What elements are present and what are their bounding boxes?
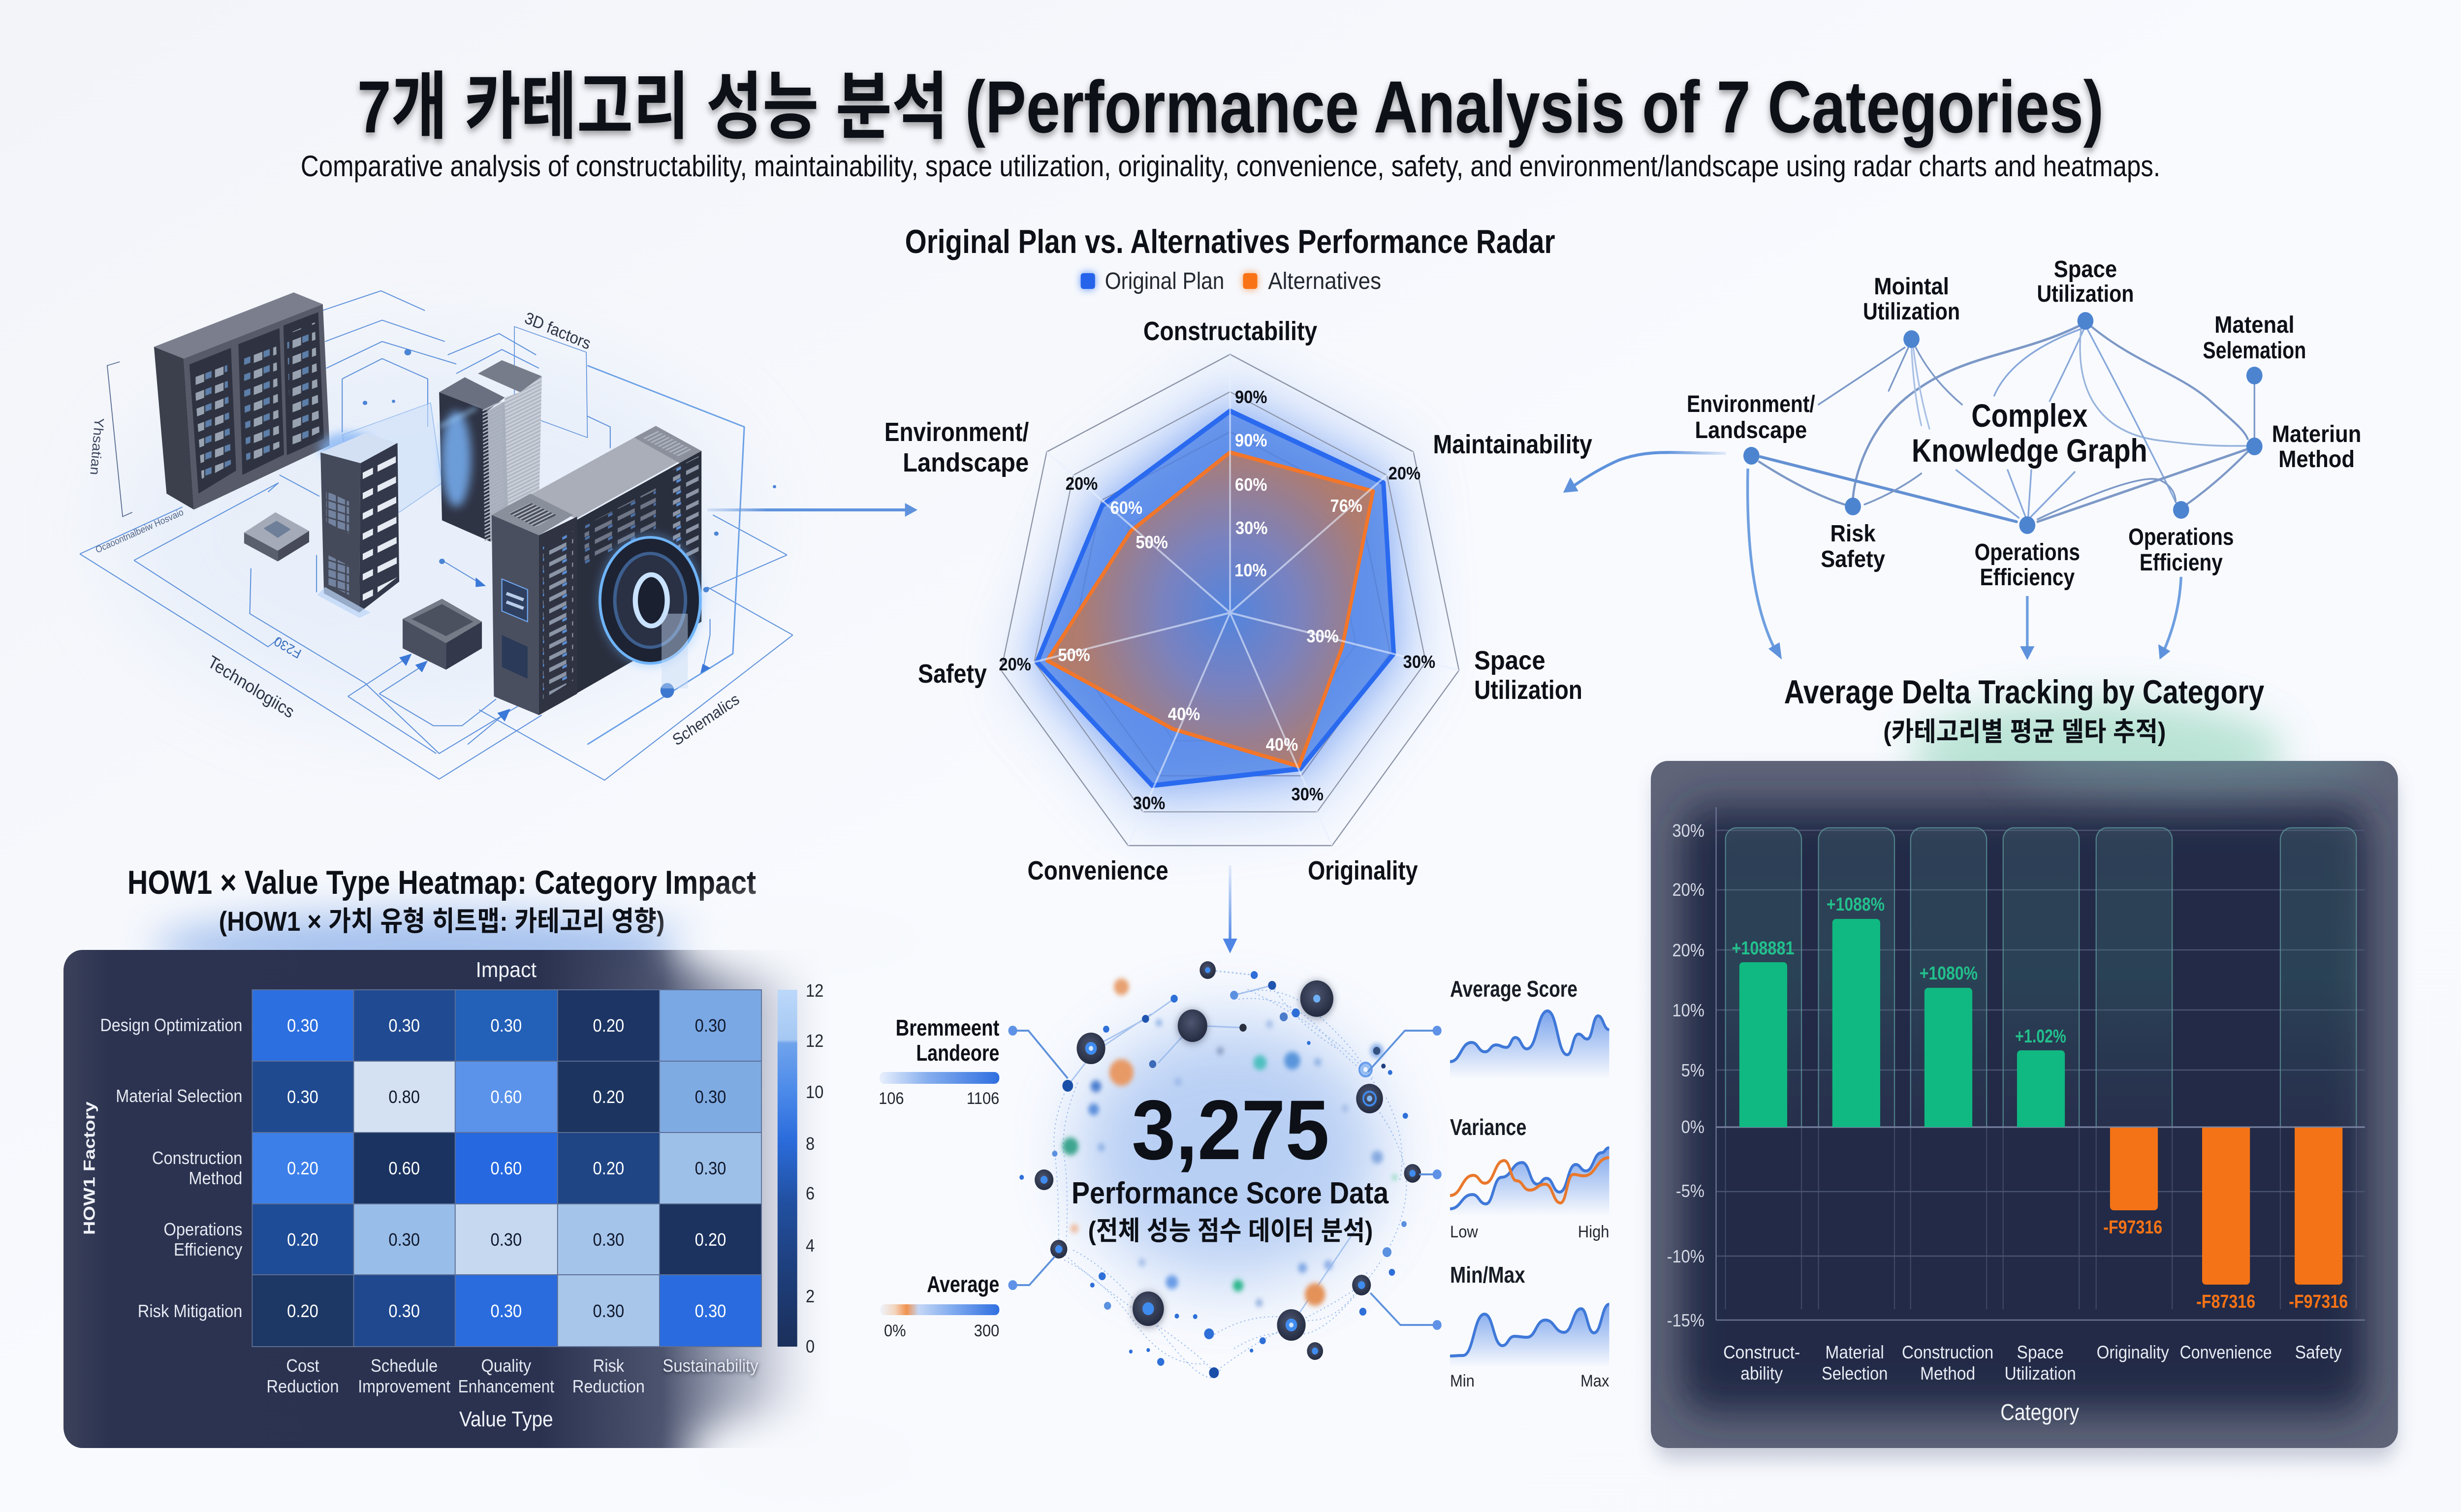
row labels: Risk Mitigation [138,1302,242,1321]
x axis labels: Space [2017,1343,2064,1362]
label: schematics: Schemalics [669,690,742,749]
radar value labels: 20% [1066,474,1098,494]
column labels [266,1356,758,1396]
sparkline: variance [1450,1115,1609,1241]
heatmap values: 0.30 [593,1230,624,1250]
heatmap values: 0.20 [593,1088,624,1107]
colorbar labels: 0 [806,1337,815,1356]
column labels: Reduction [266,1377,339,1396]
sparkline: min max: Min/Max [1450,1262,1525,1288]
left legend: range: 106 [879,1089,904,1107]
rack center tower [317,432,399,618]
bar value labels: +1080% [1920,962,1978,983]
ring node [1359,1063,1372,1076]
y axis labels: -10% [1667,1247,1704,1266]
graph labels: Environment/ [1687,390,1815,417]
radar category labels: Maintainability [1433,429,1592,459]
bar value labels: +108881 [1732,937,1795,958]
y axis labels: 30% [1672,821,1704,841]
sparkline: variance: Low [1450,1223,1478,1241]
heatmap values: 0.30 [287,1016,318,1036]
heatmap values: 0.80 [388,1088,420,1107]
heatmap values: 0.30 [695,1016,726,1036]
radar category labels: Utilization [1474,675,1582,705]
heatmap values [287,1016,726,1321]
bracket [107,362,132,517]
heatmap values: 0.30 [388,1230,420,1250]
radar value labels: 30% [1133,794,1165,813]
colorbar labels: 8 [806,1134,815,1154]
y axis labels: 10% [1672,1001,1704,1020]
large dark nodes [1035,961,1421,1360]
score caption: Performance Score Data [1072,1175,1389,1210]
heatmap values: 0.20 [287,1230,318,1250]
y axis labels: 20% [1672,941,1704,960]
small box B [403,598,482,670]
radar category labels: Originality [1308,855,1418,885]
radar value labels: 20% [999,655,1031,674]
radar category labels: Safety [918,659,987,689]
radar legend: Original Plan [1105,267,1224,294]
label: technologies: Technologiics [205,652,297,722]
heatmap subheading: (HOW1 × 가치 유형 히트맵: 카테고리 영향) [219,907,664,937]
chart heading: Average Delta Tracking by Category [1784,673,2264,711]
left legend: range: 1106 [967,1089,999,1107]
title: 7개 카테고리 성능 분석 (Performance Analysis of 7 Categories) [357,66,2104,148]
radar glow [1019,384,1413,812]
center glow [1078,1024,1382,1280]
graph labels: Risk [1830,520,1876,546]
column labels: Risk [593,1356,625,1376]
green bars [1739,919,2065,1127]
left legend: average: 0% [884,1322,906,1340]
arrow: graph to radar [1563,452,1726,493]
bar value labels: -F97316 [2103,1216,2162,1237]
colorbar labels [806,981,823,1356]
flow arrowheads [399,577,711,722]
graph labels: Mointal [1874,273,1949,299]
heatmap values: 0.20 [287,1302,318,1321]
graph labels: Utilization [1863,298,1960,324]
illustration: isometric server infrastructure [80,291,793,780]
colorbar labels: 12 [806,1032,823,1051]
y axis labels: 0% [1681,1118,1704,1137]
radar value labels: 60% [1235,475,1267,495]
radar legend: Alternatives [1268,267,1381,294]
radar value labels: 20% [1388,464,1420,483]
sparkline: average score: Average Score [1450,976,1578,1002]
callout dots [1009,1026,1442,1330]
graph labels: Safety [1821,545,1885,572]
bar value labels: +1.02% [2015,1025,2066,1046]
heatmap values: 0.30 [491,1230,522,1250]
left legend: range: Landeore [916,1040,999,1066]
radar value labels: 40% [1266,735,1298,755]
y axis labels: -15% [1667,1311,1704,1330]
column labels: Sustainability [663,1356,758,1376]
heatmap card [63,950,832,1448]
chart grid [1716,807,2365,1320]
heatmap values: 0.30 [388,1016,420,1036]
axis title: factory: HOW1 Factory [81,1102,98,1235]
radar value labels: 40% [1168,705,1200,724]
radar category labels: Constructability [1143,316,1318,346]
circuit lines [80,291,793,780]
graph labels [1687,255,2361,590]
y axis labels [1667,821,1704,1330]
panel: performance score network [879,961,1609,1390]
heatmap values: 0.60 [491,1159,522,1178]
radar spokes [1001,354,1459,846]
colorbar labels: 10 [806,1083,823,1102]
node dots [363,349,776,592]
series: alternatives [1047,452,1373,766]
heatmap values: 0.20 [695,1230,726,1250]
row labels: Design Optimization [100,1016,242,1035]
zero line [1716,1126,2365,1128]
score korean caption: (전체 성능 점수 데이터 분석) [1088,1216,1373,1246]
heatmap values: 0.20 [593,1159,624,1178]
heatmap values: 0.20 [287,1159,318,1178]
bar value labels: -F97316 [2289,1291,2348,1312]
small box A [244,512,309,562]
label: floor caption: Ocaoontnalbeiw Hosvaio [94,507,185,555]
sparkline: average score [1450,976,1609,1078]
graph labels: Efficiency [1980,564,2075,590]
ghost columns [1726,828,2356,1127]
radar category labels: Convenience [1028,855,1168,885]
bar value labels [1732,893,2348,1312]
network mesh [1054,985,1406,1378]
x axis labels: Method [1920,1364,1975,1384]
graph labels: Space [2054,255,2117,282]
callout lines [1013,1031,1437,1325]
left legend: range [879,1015,1000,1107]
heatmap values: 0.60 [388,1159,420,1178]
sparkline: min max: Min [1450,1372,1475,1390]
radar category labels [884,316,1592,885]
column labels: Improvement [358,1377,451,1396]
chart subheading: (카테고리별 평균 델타 추적) [1883,717,2166,747]
heatmap values: 0.30 [695,1302,726,1321]
arrow: illustration to radar [707,503,917,517]
left legend: average [881,1272,999,1340]
colorbar [778,990,797,1347]
graph output arrows [1748,469,2181,660]
radar value labels: 30% [1306,627,1339,646]
heatmap values: 0.30 [593,1302,624,1321]
x axis labels: Utilization [2004,1364,2076,1384]
label: flipped code: F230 [272,633,304,662]
network links [1068,970,1361,1325]
colorbar labels: 12 [806,981,823,1001]
heatmap values: 0.30 [695,1088,726,1107]
axis title: impact: Impact [476,957,536,981]
row labels [100,1016,243,1321]
radar value labels: 50% [1058,646,1090,665]
graph edges [1759,326,2254,522]
colorbar labels: 2 [806,1287,815,1306]
graph labels: Efficieny [2140,549,2223,575]
row labels: Efficiency [174,1240,243,1260]
rack 1 [154,292,330,509]
x axis labels: Material [1825,1343,1884,1362]
column labels: Schedule [371,1356,438,1376]
heatmap values: 0.30 [491,1016,522,1036]
radar value labels: 60% [1110,499,1142,518]
heatmap values: 0.30 [695,1159,726,1178]
heatmap values: 0.30 [287,1088,318,1107]
radar category labels: Environment/ [884,417,1029,447]
heatmap values: 0.30 [388,1302,420,1321]
x axis labels: Convenience [2180,1343,2272,1362]
radar category labels: Landscape [903,447,1029,477]
x axis labels [1723,1343,2342,1384]
sparkline: variance: Variance [1450,1115,1526,1140]
radar value labels: 30% [1403,653,1435,672]
panel: heatmap [63,863,935,1501]
orange bars [2110,1128,2342,1285]
column labels: Enhancement [458,1377,554,1396]
chart card [1651,728,2398,1448]
x axis labels: ability [1740,1364,1783,1384]
sparkline: min max: Max [1580,1372,1609,1390]
y axis labels: 20% [1672,881,1704,900]
small blue dots [1019,971,1408,1378]
graph labels: Method [2278,445,2355,472]
graph labels: Utilization [2037,280,2134,307]
panel: knowledge graph [1687,255,2361,660]
left legend: average: Average [927,1272,999,1297]
label: 3D factors: 3D factors [522,309,593,353]
radar grid [1001,354,1459,846]
radar value labels: 76% [1330,497,1362,516]
graph labels: Operations [2128,523,2234,550]
radar heading: Original Plan vs. Alternatives Performance Radar [905,222,1555,260]
row labels: Construction [152,1149,242,1168]
x axis labels: Originality [2097,1343,2169,1362]
arrow: radar to score [1223,865,1237,953]
column labels: Quality [481,1356,532,1376]
colorbar labels: 4 [806,1236,815,1256]
x axis labels: Construction [1902,1343,1993,1362]
x axis labels: Selection [1822,1364,1888,1384]
sparkline: variance: High [1578,1223,1609,1241]
column labels: Cost [286,1356,319,1376]
row labels: Method [189,1169,242,1188]
panel: average delta bar chart [1651,673,2398,1460]
x axis labels: Construct- [1723,1343,1800,1362]
graph labels: Materiun [2272,420,2361,447]
graph labels: Landscape [1695,416,1807,443]
graph labels: Matenal [2214,311,2294,338]
big number: 3,275 [1132,1082,1329,1177]
radar value labels: 30% [1235,519,1267,538]
rack back pair [439,360,542,541]
radar value labels: 90% [1235,388,1267,407]
subtitle: Comparative analysis of constructability, maintainability, space utilization, originality, convenience, safety, and environment/landscape using radar charts and heatmaps. [301,150,2160,183]
graph nodes [1743,312,2263,534]
radar legend [1081,267,1381,294]
graph labels: Selemation [2203,337,2306,363]
y axis labels: 5% [1681,1061,1704,1080]
heatmap values: 0.60 [491,1088,522,1107]
x axis title: Category [2000,1400,2079,1425]
label: side: Yhsatian [87,417,106,476]
large machine [492,426,703,715]
card corner fade bottom [689,1413,921,1501]
sparkline: min max [1450,1262,1609,1390]
glass enclosure [342,403,442,512]
graph labels: Operations [1975,538,2080,565]
radar value labels: 30% [1292,785,1324,804]
graph center title second line: Knowledge Graph [1912,433,2147,469]
heatmap cells [252,990,761,1347]
left legend: range: Bremmeent [896,1015,1000,1040]
blurred data points [1062,978,1397,1307]
y axis labels: -5% [1676,1182,1704,1201]
heatmap heading: HOW1 × Value Type Heatmap: Category Impact [127,863,756,901]
row labels: Material Selection [116,1087,242,1106]
column labels: Reduction [572,1377,645,1396]
bar value labels: -F87316 [2196,1291,2255,1312]
x axis labels: Safety [2295,1343,2342,1362]
radar value labels: 50% [1136,533,1168,552]
card corner fade top [666,903,935,977]
radar value labels [999,388,1435,813]
colorbar labels: 6 [806,1184,815,1203]
panel: radar chart [884,222,1592,885]
axis title: value type: Value Type [459,1407,553,1431]
radar category labels: Space [1474,645,1546,675]
radar value labels: 10% [1234,561,1267,580]
radar value labels: 90% [1235,431,1267,450]
left legend: average: 300 [974,1322,999,1340]
series: original plan [1037,411,1394,786]
heatmap values: 0.30 [491,1302,522,1321]
graph center title: Complex [1971,398,2087,434]
row labels: Operations [163,1220,242,1239]
bar value labels: +1088% [1827,893,1885,914]
heatmap values: 0.20 [593,1016,624,1036]
